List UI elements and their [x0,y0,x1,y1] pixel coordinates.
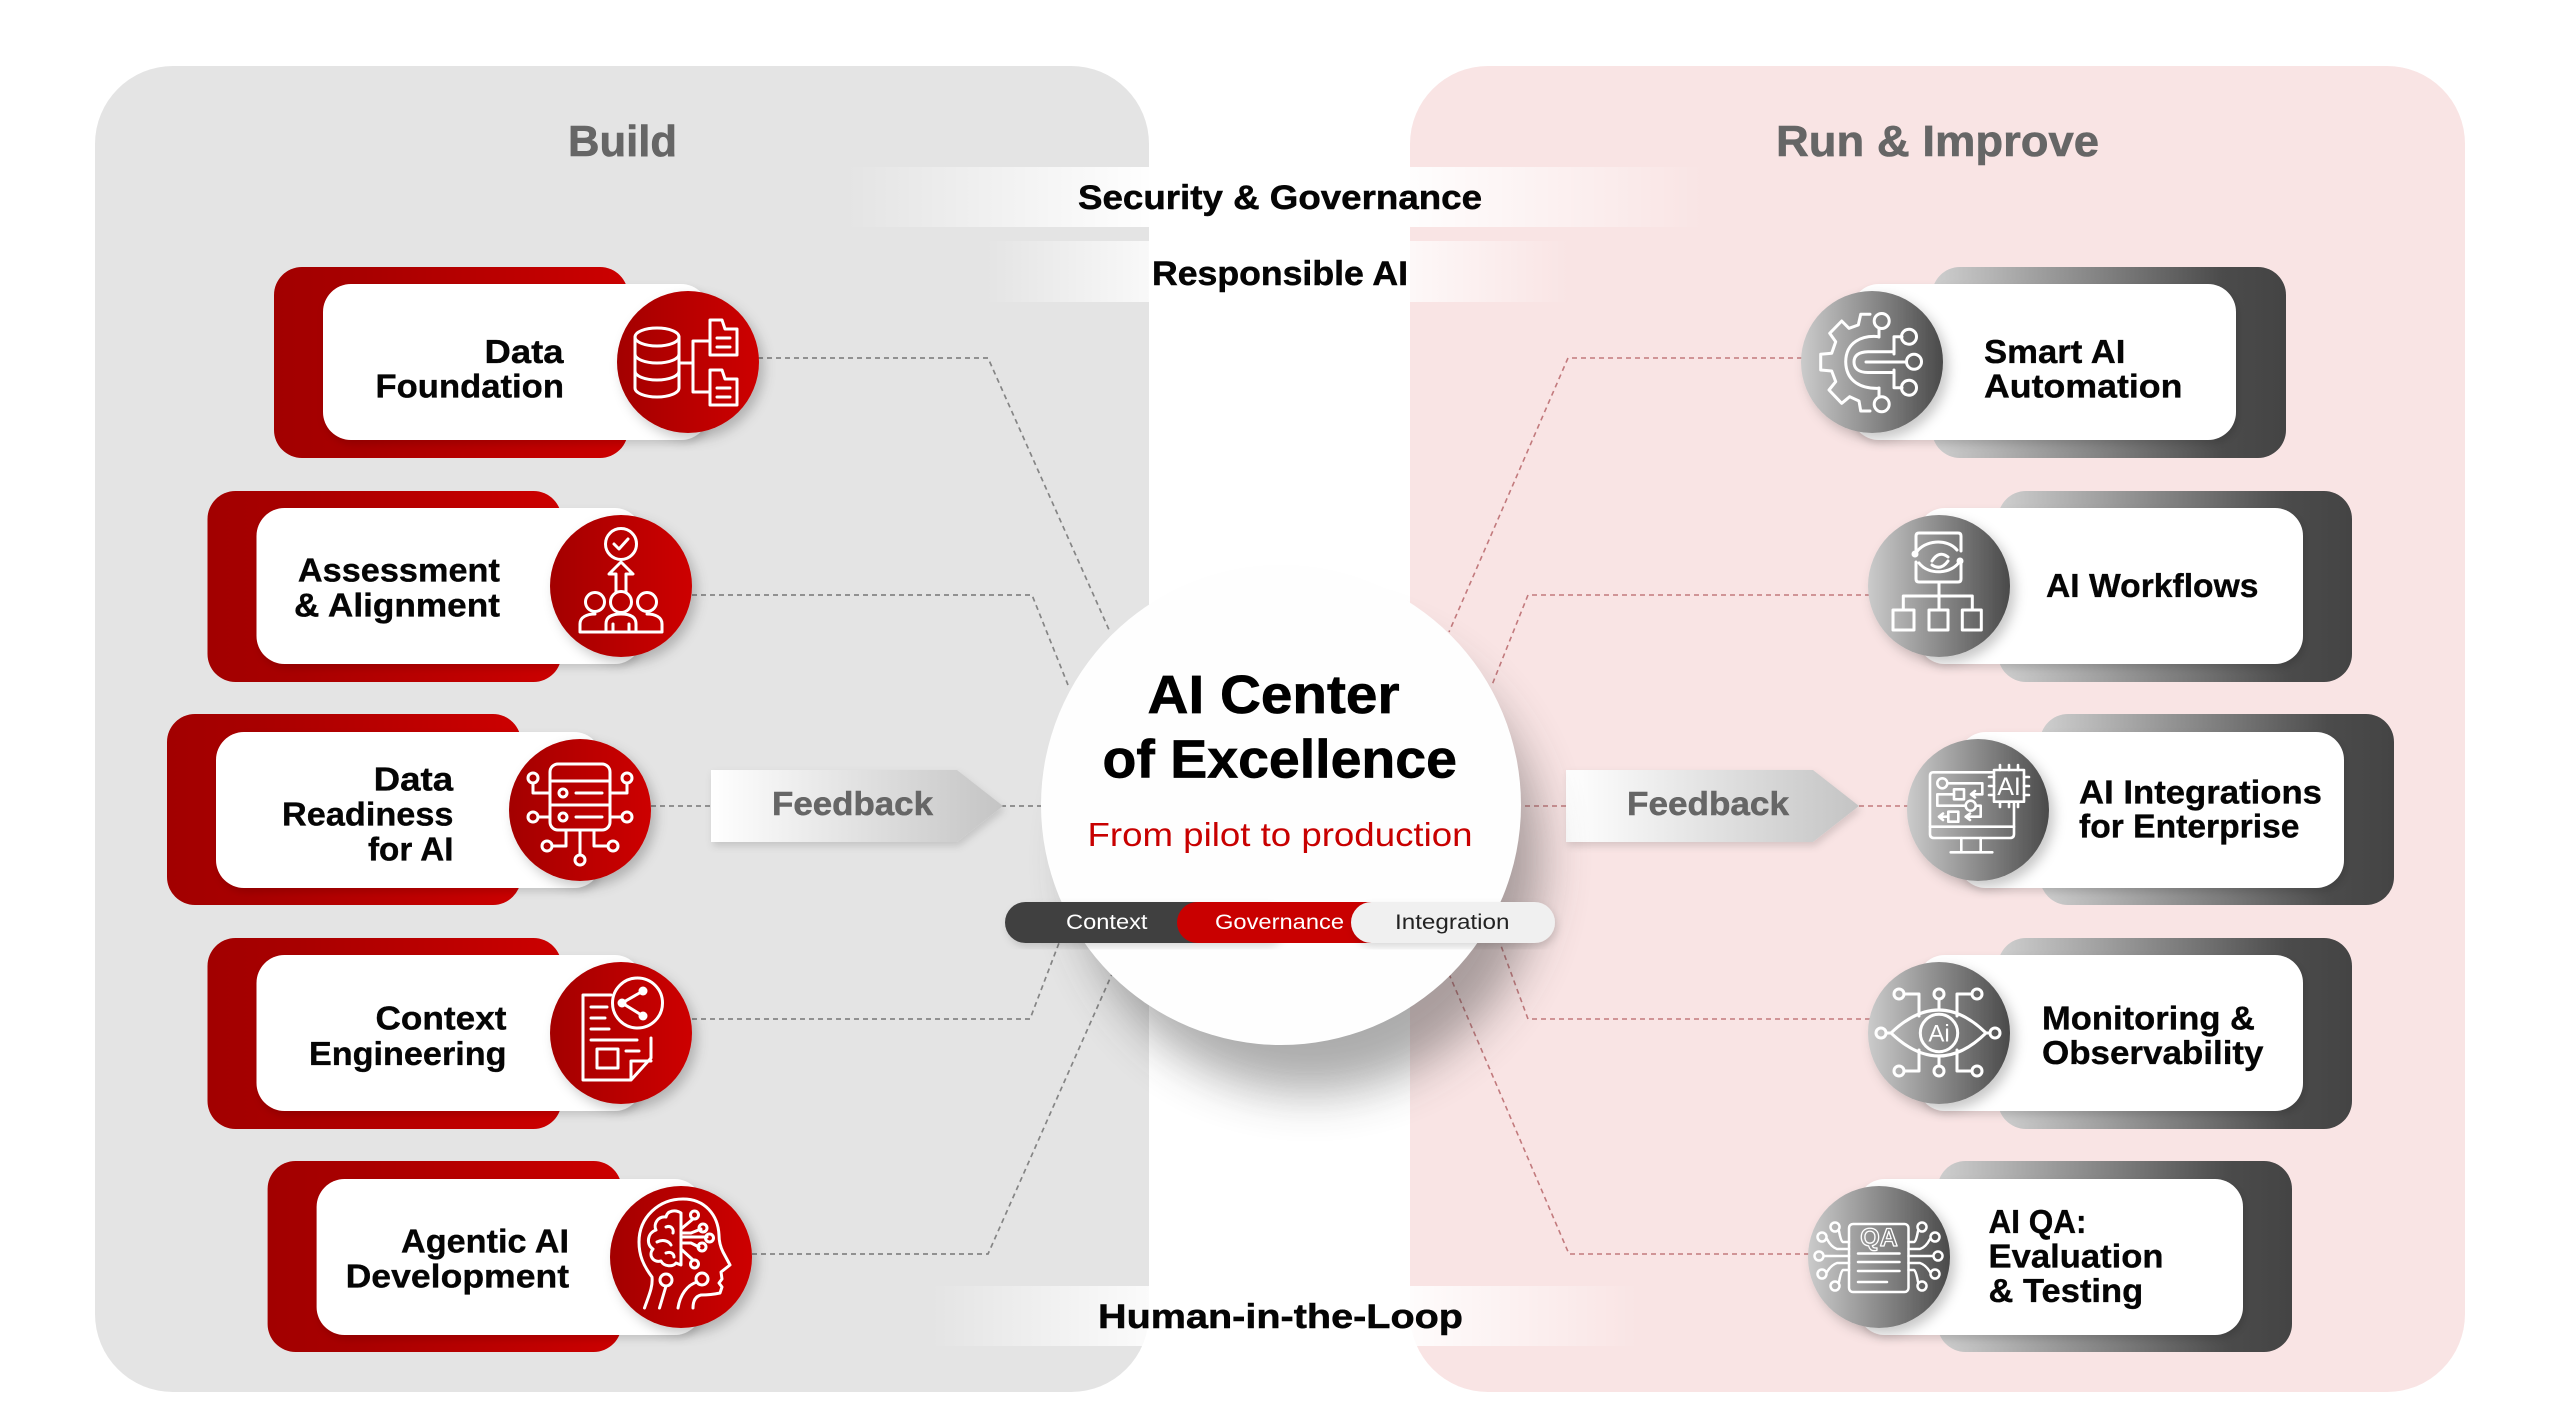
icon: database to documents [617,291,759,433]
label: Data Foundation: Foundation [376,368,564,405]
arrow: Feedback left [711,770,1003,842]
pill: Context / Governance / Integration [1005,902,1555,943]
icon: AI eye [1868,962,2010,1104]
label: Monitoring & Observability: Monitoring & [2042,1000,2255,1036]
band: Security & Governance: Security & Governance [1078,179,1482,217]
shadow: center circle [1078,628,1542,1092]
label: Data Foundation [376,333,564,405]
label: Data Readiness for AI [282,761,454,867]
card: Smart AI Automation [1801,267,2286,458]
label: Assessment & Alignment [294,552,500,624]
label: Smart AI Automation: Smart AI [1984,333,2125,370]
pill segment: Integration: Integration [1395,911,1510,934]
icon: QA document circuit [1808,1186,1950,1328]
card: Assessment & Alignment [208,491,692,682]
pill segment: Governance: Governance [1215,911,1344,934]
band: Security & Governance [845,167,1705,227]
card: Agentic AI Development [268,1161,752,1352]
icon: monitor with AI chip: AI [1997,773,2021,801]
pill segment: Integration [1351,902,1555,943]
label: Data Readiness for AI: Readiness [282,796,454,833]
hub subtitle: From pilot to production [1088,816,1472,853]
label: AI QA: Evaluation & Testing [1988,1203,2164,1309]
label: AI QA: Evaluation & Testing: & Testing [1988,1272,2143,1309]
label: Agentic AI Development [346,1222,569,1295]
label: AI Workflows: AI Workflows [2046,567,2258,604]
icon: QA document circuit: QA [1860,1224,1898,1252]
label: Monitoring & Observability: Observability [2042,1034,2264,1071]
card: Monitoring & Observability [1868,938,2352,1129]
arrow: Feedback right [1566,770,1859,842]
card: AI Integrations for Enterprise [1907,714,2394,905]
label: AI Integrations for Enterprise: for Enterprise [2079,807,2300,844]
pill segment: Context [1005,902,1285,943]
label: AI QA: Evaluation & Testing: Evaluation [1988,1238,2164,1275]
icon: monitor with AI chip [1907,739,2049,881]
band: Responsible AI [985,241,1570,302]
arrow: Feedback right: Feedback [1627,785,1790,822]
dashed connectors: left [651,358,1112,1254]
panel: Build [95,66,1149,1392]
card: Data Readiness for AI [167,714,651,905]
icon: document share [550,962,692,1104]
panel: Run & Improve [1410,66,2465,1392]
label: Agentic AI Development: Development [346,1258,569,1295]
card: Context Engineering [208,938,692,1129]
card: AI Workflows [1868,491,2352,682]
band: Human-in-the-Loop [930,1286,1640,1346]
label: Smart AI Automation: Automation [1984,368,2182,405]
label: Data Readiness for AI: Data [374,761,454,798]
label: Context Engineering: Context [376,1000,506,1036]
label: AI QA: Evaluation & Testing: AI QA: [1988,1203,2086,1240]
icon: team goal [550,515,692,657]
icon: gear circuit [1801,291,1943,433]
pill segment: Context: Context [1066,911,1148,934]
label: Assessment & Alignment: Assessment [298,552,500,589]
label: Context Engineering [309,1000,506,1072]
label: Context Engineering: Engineering [309,1035,506,1072]
icon: server circuit [509,739,651,881]
label: AI Integrations for Enterprise [2079,774,2322,844]
band: Human-in-the-Loop: Human-in-the-Loop [1098,1298,1463,1336]
heading: Run & Improve: Run & Improve [1776,117,2099,166]
icon: AI eye: Ai [1928,1020,1950,1048]
hub title [1102,665,1457,790]
arrow: Feedback left: Feedback [772,785,934,822]
label: Data Readiness for AI: for AI [368,830,454,867]
hub: AI Center of Excellence [1041,565,1521,1045]
label: Smart AI Automation [1984,333,2182,405]
label: Assessment & Alignment: & Alignment [294,587,500,624]
label: Monitoring & Observability [2042,1000,2264,1071]
icon: workflow tree [1868,515,2010,657]
label: Data Foundation: Data [484,333,564,370]
heading: Build: Build [568,117,677,166]
card: AI QA Evaluation & Testing [1808,1161,2292,1352]
band: Responsible AI: Responsible AI [1152,255,1408,293]
pill segment: Governance [1177,902,1402,943]
hub title: AI Center [1148,665,1400,725]
dashed connectors: right [1449,358,1909,1254]
card: Data Foundation [274,267,759,458]
icon: AI brain head [610,1186,752,1328]
label: AI Integrations for Enterprise: AI Integrations [2079,774,2322,811]
label: Agentic AI Development: Agentic AI [401,1222,569,1259]
hub title: of Excellence [1102,730,1457,790]
